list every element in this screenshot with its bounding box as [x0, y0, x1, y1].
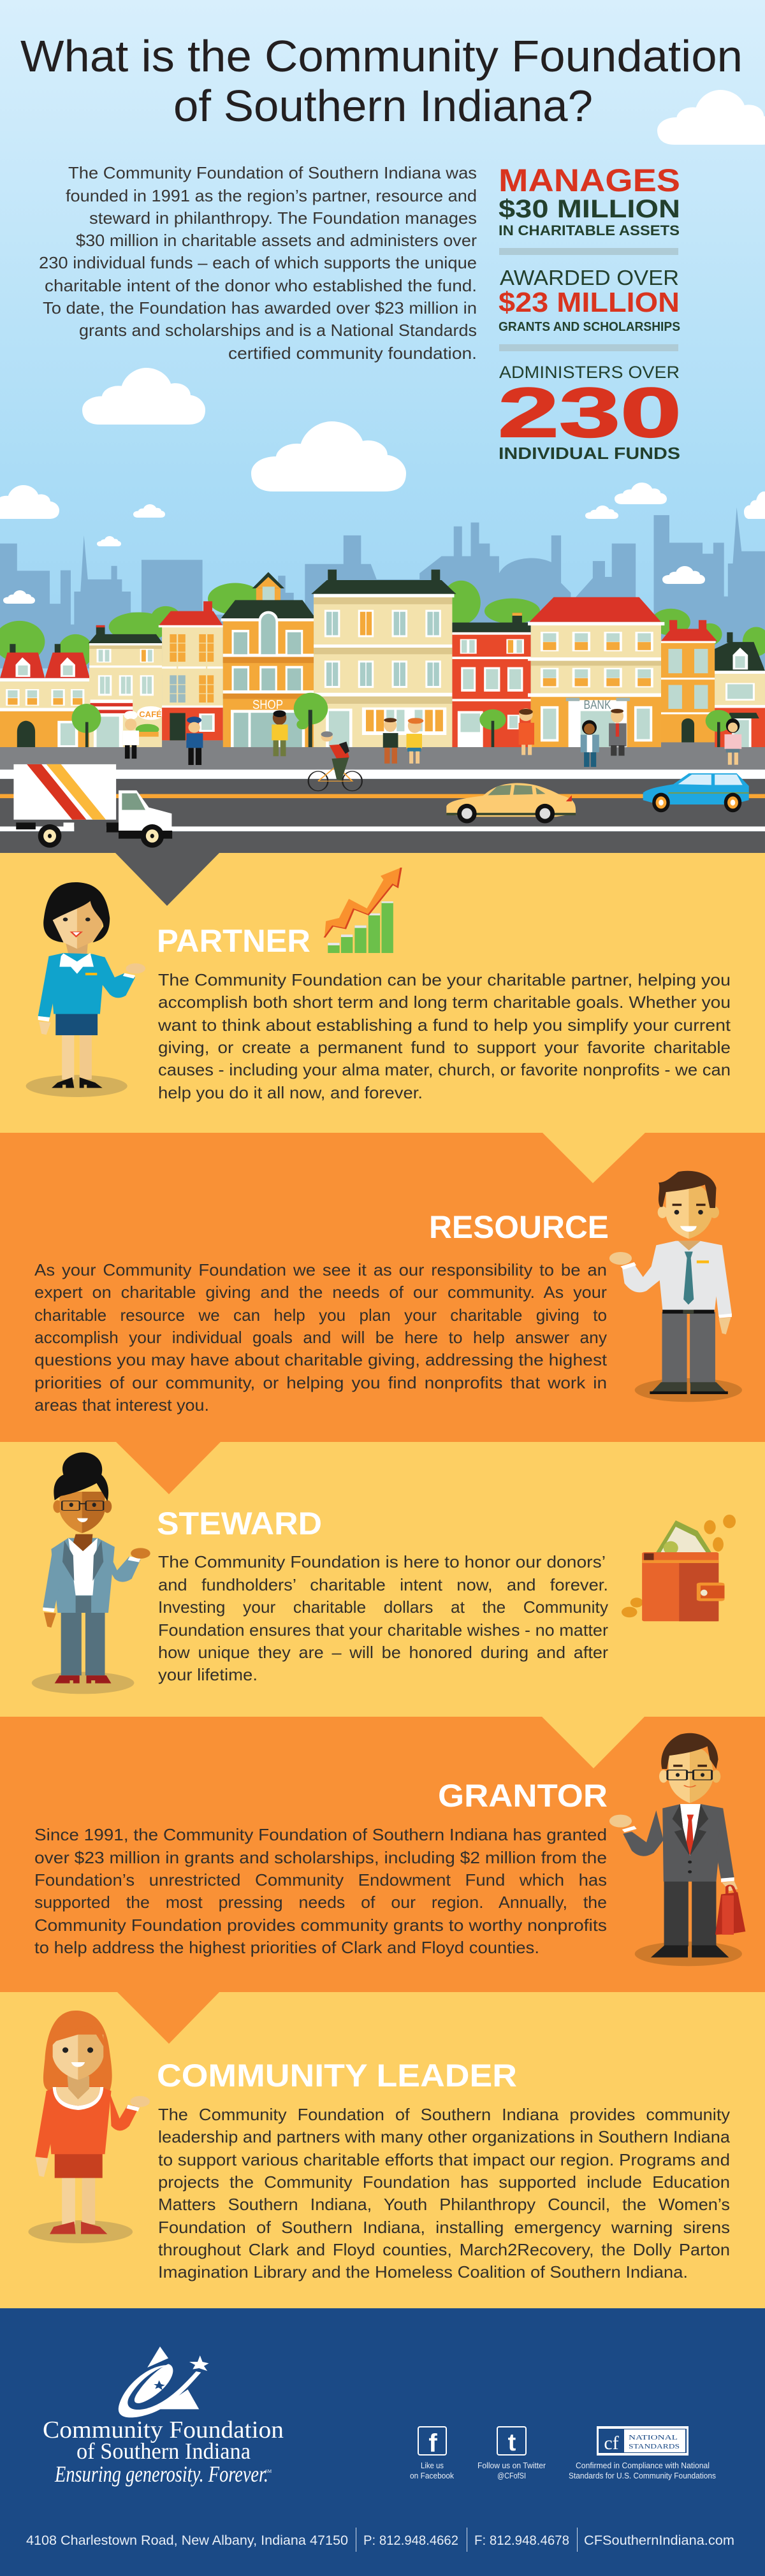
- cloud: right upper: [615, 483, 667, 504]
- intro paragraph: charitable intent of the donor who established the fund.: [45, 276, 477, 295]
- stat: awarded over $23 million: [499, 266, 680, 334]
- body text: partner: causes - including your alma mater, church, or favorite nonprofits - we can: [158, 1060, 731, 1079]
- contact line: F: 812.948.4678: [474, 2533, 569, 2548]
- panel: steward: [0, 1442, 765, 1717]
- organisation name: of Southern Indiana: [76, 2438, 251, 2464]
- body text: partner: help you do it all now, and forever.: [158, 1083, 423, 1102]
- logo mark: [119, 2347, 209, 2417]
- label: twitter: Follow us on Twitter: [477, 2461, 546, 2470]
- stat: awarded over $23 million: $23 MILLION: [499, 287, 680, 318]
- intro paragraph: grants and scholarships and is a National Standards: [79, 321, 477, 340]
- stat: administers over 230: 230: [498, 374, 681, 452]
- building 7: bank: [528, 597, 664, 747]
- cloud: small right skyline: [662, 566, 705, 584]
- body text: grantor: [34, 1825, 607, 1957]
- icon: wallet with money and coins: [622, 1515, 736, 1621]
- label: national standards: Standards for U.S. Community Foundations: [569, 2471, 716, 2480]
- body text: steward: Investing your charitable dollars at the Community: [158, 1597, 608, 1617]
- body text: community leader: projects the Community Foundation has supported include Education: [158, 2172, 730, 2192]
- contact line: [26, 2533, 734, 2548]
- title: of Southern Indiana?: [173, 81, 593, 131]
- body text: steward: your lifetime.: [158, 1665, 258, 1684]
- intro paragraph: 230 individual funds – each of which supports the unique: [39, 253, 477, 272]
- intro paragraph: certified community foundation.: [228, 344, 477, 363]
- label: facebook: Like us: [421, 2461, 444, 2470]
- body text: partner: want to think about establishing a fund to help you simplify your current: [157, 1015, 731, 1035]
- body text: resource: charitable resource we can help you plan your charitable giving to: [34, 1306, 607, 1325]
- body text: steward: how unique they are – will be honored during and after: [158, 1643, 608, 1662]
- cloud: left of stats: [82, 368, 205, 425]
- character: steward woman: [32, 1452, 150, 1694]
- label: national standards: Confirmed in Compliance with National: [576, 2461, 710, 2470]
- building 5: large cream: [311, 570, 456, 747]
- body text: community leader: [158, 2105, 731, 2281]
- body text: grantor: over $23 million in grants and scholarships, including $2 million from the: [34, 1848, 607, 1867]
- pointer from partner: [543, 1133, 645, 1183]
- body text: steward: The Community Foundation is here to honor our donors’: [158, 1552, 606, 1571]
- body text: resource: questions you may have about charitable giving, addressing the highest: [34, 1350, 608, 1369]
- body text: partner: [157, 970, 731, 1102]
- stat: administers over 230: ADMINISTERS OVER: [499, 363, 680, 382]
- title: [20, 31, 743, 131]
- cloud: right small: [585, 506, 618, 519]
- panel: grantor: [0, 1717, 765, 1992]
- cloud: small left skyline: [3, 590, 35, 604]
- pointer from resource: [116, 1442, 221, 1494]
- cafe sign: CAFÉ: [139, 709, 162, 719]
- contact line: P: 812.948.4662: [363, 2533, 458, 2548]
- icon: facebook: [418, 2427, 446, 2457]
- stat: manages $30 million: $30 MILLION: [499, 195, 680, 223]
- person: girl in pink: [724, 718, 741, 765]
- pointer from grantor: [117, 1992, 219, 2044]
- sidewalk: [0, 740, 765, 769]
- shop sign: SHOP: [252, 698, 283, 712]
- body text: community leader: Foundation of Southern Indiana, installing emergency warning sirens: [158, 2218, 730, 2237]
- building 2: cafe: [89, 625, 164, 747]
- body text: resource: accomplish your individual goals and will be here to help answer any: [34, 1328, 607, 1347]
- body text: grantor: Foundation’s unrestricted Community Endowment Fund which has: [34, 1870, 607, 1889]
- contact line: CFSouthernIndiana.com: [584, 2533, 734, 2548]
- body text: grantor: Community Foundation provides community grants to worthy nonprofits: [34, 1916, 607, 1935]
- cloud: small skyline: [97, 536, 121, 546]
- badge: national standards: STANDARDS: [629, 2443, 680, 2450]
- city street illustration: [0, 570, 765, 854]
- organisation name: [43, 2417, 284, 2487]
- vehicle: blue hatchback: [643, 773, 749, 812]
- stat: manages $30 million: [499, 163, 680, 238]
- cloud: small one: [133, 504, 165, 518]
- body text: grantor: to help address the highest priorities of Clark and Floyd counties.: [34, 1938, 539, 1957]
- body text: resource: priorities of our community, or helping you find nonprofits that work in: [34, 1373, 607, 1392]
- body text: community leader: Matters Southern Indiana, Youth Philanthropy Council, the Women’s: [158, 2195, 730, 2214]
- building 1: red mansards: [0, 644, 90, 747]
- character: partner woman: [26, 882, 145, 1097]
- body text: steward: [158, 1552, 608, 1684]
- person: cyclist with bicycle: [309, 731, 362, 791]
- icon: facebook: f: [428, 2429, 437, 2457]
- person: man in dark shirt: [383, 718, 398, 764]
- icon: growth chart: [324, 868, 401, 953]
- body text: partner: giving, or create a permanent fund to support your favorite charitable: [158, 1038, 731, 1057]
- character: community leader woman: [28, 2011, 150, 2243]
- badge: national standards: cf: [604, 2433, 619, 2454]
- person: man in yellow vest: [272, 710, 288, 756]
- stat: administers over 230: INDIVIDUAL FUNDS: [499, 444, 680, 463]
- body text: community leader: Imagination Library and the Homeless Coalition of Southern Indiana.: [158, 2262, 688, 2281]
- heading: community leader: COMMUNITY LEADER: [157, 2058, 517, 2093]
- intro paragraph: The Community Foundation of Southern Indiana was: [68, 163, 477, 182]
- label: facebook: on Facebook: [410, 2471, 454, 2480]
- body text: partner: accomplish both short term and long term charitable goals. Whether you: [158, 993, 731, 1012]
- heading: grantor: GRANTOR: [438, 1778, 608, 1814]
- person: man in suit: [609, 709, 627, 756]
- organisation name: Ensuring generosity. Forever.: [54, 2461, 268, 2487]
- vehicle: delivery truck: [13, 764, 172, 848]
- label: facebook: [410, 2461, 454, 2480]
- stat: administers over 230: [498, 363, 681, 463]
- intro paragraph: founded in 1991 as the region’s partner, resource and: [66, 186, 477, 205]
- stat: awarded over $23 million: AWARDED OVER: [500, 266, 679, 289]
- body text: steward: Foundation ensures that your charitable wishes - no matter: [158, 1620, 608, 1640]
- label: twitter: @CFofSI: [497, 2471, 526, 2480]
- building 4: shop: [221, 572, 316, 747]
- cloud: far right: [744, 491, 765, 519]
- heading: resource: RESOURCE: [429, 1209, 609, 1245]
- intro paragraph: $30 million in charitable assets and administers over: [76, 231, 477, 250]
- person: woman in teal jacket: [581, 720, 599, 767]
- icon: twitter: [497, 2427, 526, 2456]
- building 8: orange narrow: [661, 620, 717, 742]
- badge: national standards: [597, 2426, 688, 2456]
- cloud: top right: [657, 90, 765, 145]
- bank sign: BANK: [584, 699, 611, 712]
- body text: resource: As your Community Foundation we see it as our responsibility to be an: [34, 1260, 607, 1279]
- label: national standards: [569, 2461, 716, 2480]
- intro paragraph: [39, 163, 477, 363]
- icon: twitter: t: [508, 2429, 516, 2456]
- pointer from road: [115, 853, 219, 906]
- city skyline: [0, 507, 765, 669]
- body text: grantor: Since 1991, the Community Foundation of Southern Indiana has granted: [34, 1825, 607, 1844]
- character: resource man: [609, 1171, 742, 1402]
- street trees: [71, 693, 732, 747]
- panel: partner: [0, 853, 765, 1133]
- footer: [0, 2308, 765, 2576]
- pointer from steward: [542, 1717, 645, 1768]
- body text: community leader: leadership and partners with many other organizations in Southern Indiana: [158, 2127, 731, 2146]
- title: What is the Community Foundation: [20, 31, 743, 81]
- body text: resource: expert on charitable giving and the needs of our community. As your: [34, 1283, 607, 1302]
- character: grantor man: [609, 1733, 745, 1966]
- building 3: red roof: [159, 601, 223, 740]
- cloud: centre: [251, 421, 406, 491]
- body text: community leader: The Community Foundation of Southern Indiana provides community: [158, 2105, 730, 2124]
- organisation name: SM: [265, 2469, 272, 2474]
- building 9: far right: [715, 632, 765, 747]
- body text: resource: areas that interest you.: [34, 1395, 209, 1415]
- badge: national standards: NATIONAL: [629, 2434, 678, 2441]
- body text: grantor: supported the most pressing needs of our region. Annually, the: [34, 1893, 607, 1912]
- body text: steward: and fundholders’ charitable intent now, and forever.: [158, 1575, 608, 1594]
- heading: steward: STEWARD: [157, 1506, 322, 1541]
- person: woman in orange dress: [519, 708, 534, 755]
- lower street bands: [0, 747, 765, 769]
- cloud: upper left city: [0, 485, 59, 519]
- contact line: 4108 Charlestown Road, New Albany, Indiana 47150: [26, 2533, 348, 2548]
- stat: manages $30 million: MANAGES: [499, 163, 680, 198]
- person: chef: [123, 711, 139, 759]
- person: police officer: [186, 717, 203, 765]
- body text: community leader: to support various charitable efforts that impact our region. Programs and: [158, 2150, 730, 2169]
- body text: community leader: throughout Clark and Floyd counties, March2Recovery, the Dolly Parton: [158, 2240, 730, 2259]
- panel: community leader: [0, 1992, 765, 2308]
- intro paragraph: To date, the Foundation has awarded over $23 million in: [43, 298, 477, 317]
- organisation name: Community Foundation: [43, 2417, 284, 2443]
- background trees: [0, 581, 765, 669]
- building 6: red brick: [452, 613, 531, 747]
- vehicle: yellow taxi: [446, 783, 576, 824]
- body text: partner: The Community Foundation can be your charitable partner, helping you: [158, 970, 731, 989]
- body text: resource: [34, 1260, 608, 1415]
- panel: resource: [0, 1133, 765, 1442]
- intro paragraph: steward in philanthropy. The Foundation manages: [89, 208, 477, 228]
- person: woman in yellow: [406, 718, 423, 764]
- stat: awarded over $23 million: GRANTS AND SCHOLARSHIPS: [499, 320, 680, 334]
- label: twitter: [477, 2461, 546, 2480]
- sky background: [0, 0, 765, 854]
- stat: manages $30 million: IN CHARITABLE ASSETS: [499, 222, 680, 238]
- heading: partner: PARTNER: [157, 923, 310, 959]
